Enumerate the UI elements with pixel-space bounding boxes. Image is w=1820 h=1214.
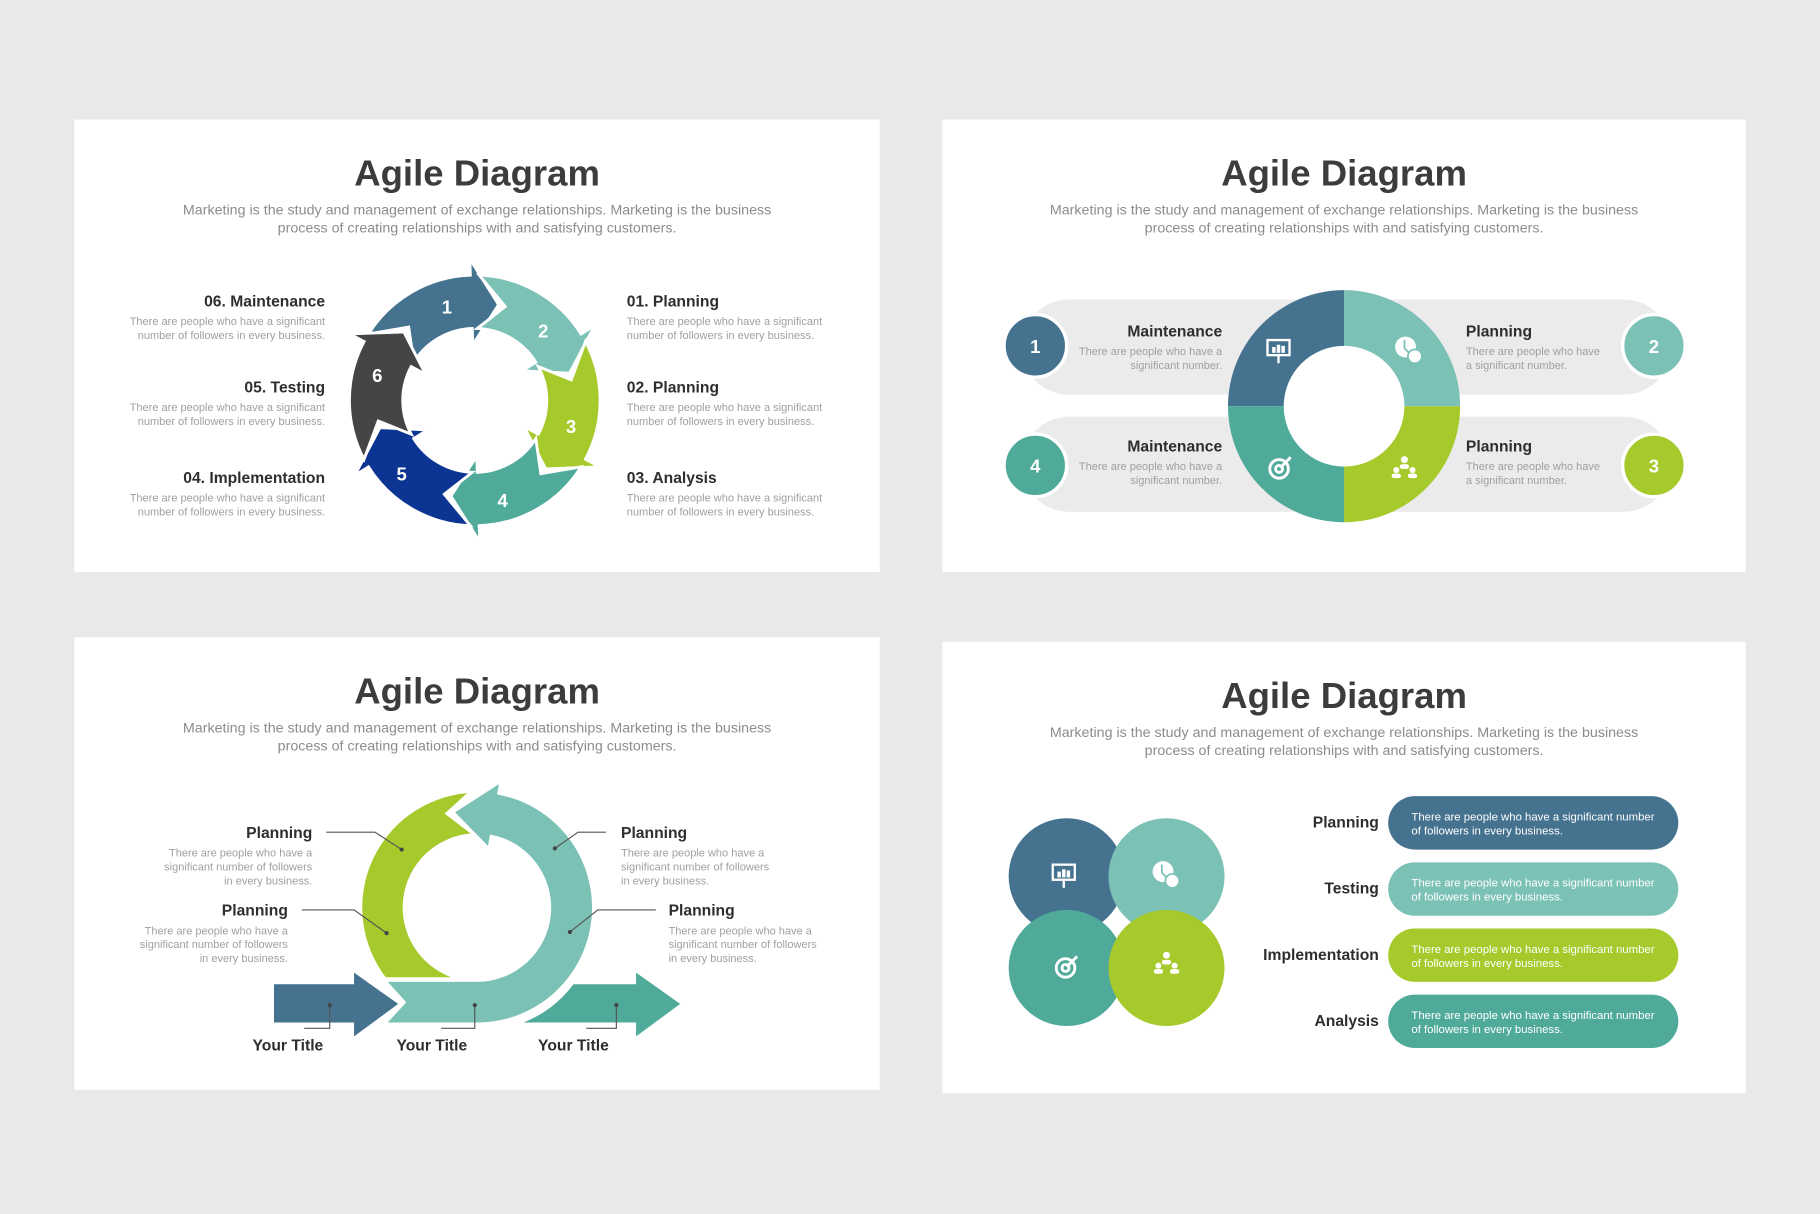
loop labels [140, 825, 817, 1054]
loop labels: significant number of followers [621, 861, 770, 873]
loop labels: in every business. [224, 875, 312, 887]
pills: of followers in every business. [1411, 958, 1563, 970]
donut labels: There are people who have a [1079, 346, 1223, 358]
panel: donut diagram: 3 [1649, 455, 1659, 476]
subtitle: process of creating relationships with and satisfying customers. [278, 221, 677, 237]
cycle numbers: 6 [372, 365, 382, 386]
subtitle: Marketing is the study and management of exchange relationships. Marketing is the business [183, 203, 771, 219]
panel: donut diagram: 1 [1030, 336, 1041, 357]
left labels: number of followers in every business. [138, 330, 325, 342]
donut labels: Maintenance [1127, 324, 1222, 341]
title: Agile Diagram [1221, 675, 1467, 716]
left labels [130, 293, 325, 518]
right labels: There are people who have a significant [627, 402, 822, 414]
loop labels: There are people who have a [169, 848, 313, 860]
subtitle: process of creating relationships with and satisfying customers. [278, 738, 677, 754]
subtitle: Marketing is the study and management of exchange relationships. Marketing is the business [1050, 725, 1638, 741]
donut [1228, 290, 1460, 522]
donut labels: significant number. [1130, 360, 1222, 372]
right labels: 03. Analysis [627, 470, 717, 487]
right labels: There are people who have a significant [627, 492, 822, 504]
loop labels: Your Title [396, 1037, 467, 1054]
pills: There are people who have a significant number [1411, 1010, 1655, 1022]
subtitle: process of creating relationships with and satisfying customers. [1145, 743, 1543, 759]
pills: There are people who have a significant number [1411, 878, 1655, 890]
left labels: 04. Implementation [183, 470, 325, 487]
cycle numbers: 1 [442, 296, 452, 317]
panel: donut diagram: 2 [1649, 336, 1659, 357]
cycle numbers: 3 [566, 416, 576, 437]
left labels: number of followers in every business. [138, 506, 325, 518]
loop labels: There are people who have a [669, 925, 813, 937]
subtitle: Marketing is the study and management of exchange relationships. Marketing is the business [183, 720, 771, 736]
loop labels: significant number of followers [669, 939, 817, 951]
cycle numbers: 4 [497, 490, 508, 511]
title: Agile Diagram [354, 153, 600, 194]
loop labels: Planning [669, 903, 735, 920]
loop labels: Planning [621, 825, 687, 842]
title: Agile Diagram [1221, 153, 1467, 194]
icon: target [1270, 457, 1291, 478]
right labels: 01. Planning [627, 293, 719, 310]
loop arrows [274, 784, 680, 1036]
cycle numbers: 2 [538, 321, 548, 342]
title: Agile Diagram [354, 670, 600, 711]
icon: people [1392, 456, 1417, 478]
left labels: 05. Testing [244, 379, 325, 396]
panel: donut diagram [942, 120, 1746, 572]
icon: clock dollar [1395, 337, 1422, 363]
pills: There are people who have a significant number [1411, 944, 1655, 956]
pills: of followers in every business. [1411, 1024, 1563, 1036]
loop labels: Planning [222, 903, 288, 920]
cycle numbers: 5 [396, 463, 407, 484]
pill labels: Implementation [1263, 947, 1379, 964]
donut labels: Planning [1466, 324, 1532, 341]
right labels: 02. Planning [627, 379, 719, 396]
donut labels: a significant number. [1466, 475, 1567, 487]
loop labels: significant number of followers [164, 861, 313, 873]
left labels: 06. Maintenance [204, 293, 325, 310]
pill labels: Planning [1313, 815, 1379, 832]
panel: donut diagram: 4 [1030, 455, 1041, 476]
donut labels: Maintenance [1127, 438, 1222, 455]
left labels: There are people who have a significant [130, 492, 325, 504]
cycle numbers [372, 296, 576, 511]
loop labels: Your Title [538, 1037, 609, 1054]
donut labels: a significant number. [1466, 360, 1567, 372]
right labels [627, 293, 822, 518]
pill labels: Analysis [1314, 1013, 1379, 1030]
loop labels: There are people who have a [621, 848, 765, 860]
pills: of followers in every business. [1411, 892, 1563, 904]
icon: board [1267, 340, 1290, 363]
subtitle: process of creating relationships with and satisfying customers. [1145, 221, 1543, 237]
loop labels: There are people who have a [145, 925, 289, 937]
leader lines [302, 832, 656, 1028]
loop labels: in every business. [200, 953, 288, 965]
number circles [1004, 315, 1685, 497]
loop labels: in every business. [669, 953, 757, 965]
donut labels: significant number. [1130, 475, 1222, 487]
loop labels: Your Title [253, 1037, 324, 1054]
donut labels [1079, 324, 1600, 487]
gray bands [1021, 299, 1671, 512]
circles cluster [1009, 818, 1225, 1026]
right labels: There are people who have a significant [627, 316, 822, 328]
donut labels: Planning [1466, 438, 1532, 455]
right labels: number of followers in every business. [627, 330, 814, 342]
pills [1388, 796, 1678, 1048]
loop labels: in every business. [621, 875, 709, 887]
donut labels: There are people who have [1466, 346, 1600, 358]
right labels: number of followers in every business. [627, 506, 814, 518]
donut labels: There are people who have [1466, 461, 1600, 473]
left labels: There are people who have a significant [130, 402, 325, 414]
panel: cycle diagram [74, 120, 880, 572]
subtitle: Marketing is the study and management of exchange relationships. Marketing is the business [1050, 203, 1638, 219]
panel: circles and pills [942, 642, 1746, 1093]
pill labels: Testing [1324, 881, 1379, 898]
loop labels: Planning [246, 825, 312, 842]
pills: of followers in every business. [1411, 825, 1563, 837]
left labels: number of followers in every business. [138, 416, 325, 428]
pills: There are people who have a significant number [1411, 812, 1655, 824]
donut labels: There are people who have a [1079, 461, 1223, 473]
left labels: There are people who have a significant [130, 316, 325, 328]
right labels: number of followers in every business. [627, 416, 814, 428]
loop labels: significant number of followers [140, 939, 288, 951]
panel: loop diagram [74, 637, 880, 1090]
cycle arrows [321, 243, 628, 558]
pill labels [1263, 815, 1379, 1030]
